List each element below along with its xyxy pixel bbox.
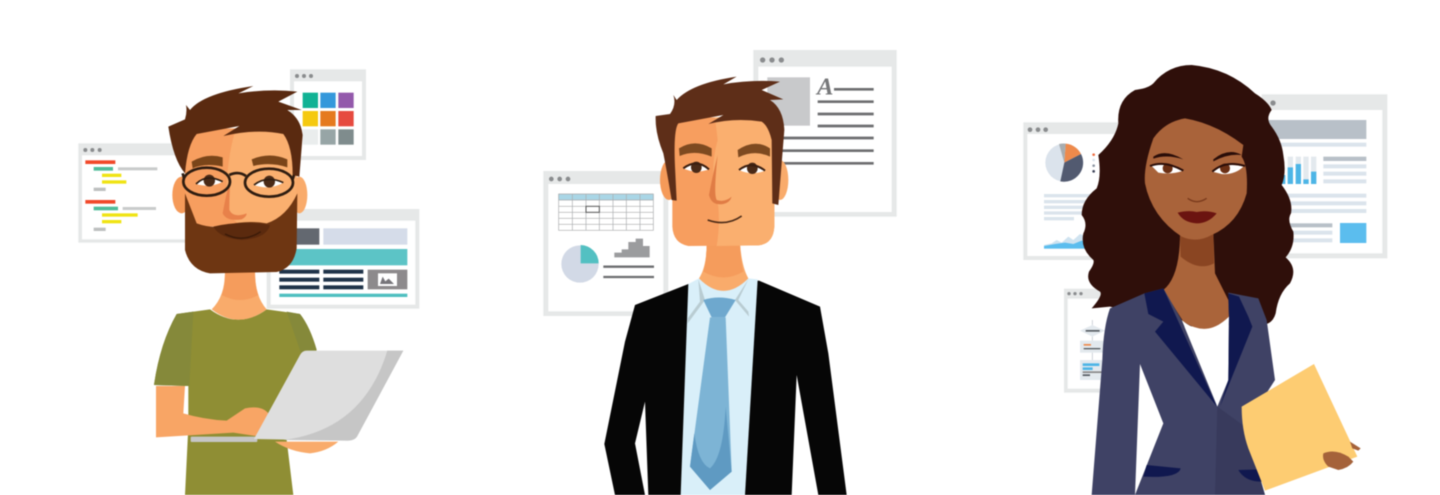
hand holding folder <box>1323 442 1361 470</box>
lapels <box>1144 288 1217 407</box>
neck and chest <box>1163 233 1229 329</box>
pie chart <box>561 245 599 283</box>
shirt <box>154 309 317 495</box>
person group: businesswoman with folder <box>1023 65 1387 495</box>
window: web page layout <box>267 209 419 309</box>
arm and typing hand <box>156 386 268 437</box>
pockets <box>1143 465 1181 477</box>
bar chart <box>614 239 650 257</box>
head: face, ears, hair <box>656 77 788 246</box>
area chart <box>1044 234 1092 249</box>
window: spreadsheet and charts <box>543 171 668 316</box>
person group: developer with laptop <box>78 69 419 495</box>
shirt <box>681 278 758 495</box>
window: dashboard left <box>1023 122 1123 260</box>
hair <box>1082 65 1294 327</box>
laptop <box>191 351 403 442</box>
bar chart <box>1280 157 1316 184</box>
neck <box>212 272 267 320</box>
tie <box>690 297 736 490</box>
window: dashboard right <box>1262 94 1387 258</box>
head: face, ears, beard, hair, glasses <box>168 86 307 273</box>
letter A: A <box>815 74 833 101</box>
blouse <box>1182 317 1229 407</box>
suit <box>604 281 847 495</box>
folder <box>1242 364 1357 491</box>
window: article layout <box>753 50 897 217</box>
window: code editor <box>78 143 188 243</box>
person group: businessman in suit <box>543 50 897 495</box>
window: flowchart <box>1064 289 1151 393</box>
supporting hand <box>275 442 338 453</box>
neck <box>699 243 748 291</box>
head: face and features <box>1145 118 1247 240</box>
window: colour palette <box>290 69 366 160</box>
spreadsheet table <box>558 194 654 230</box>
jacket <box>1092 288 1275 495</box>
pie chart <box>1045 144 1083 182</box>
